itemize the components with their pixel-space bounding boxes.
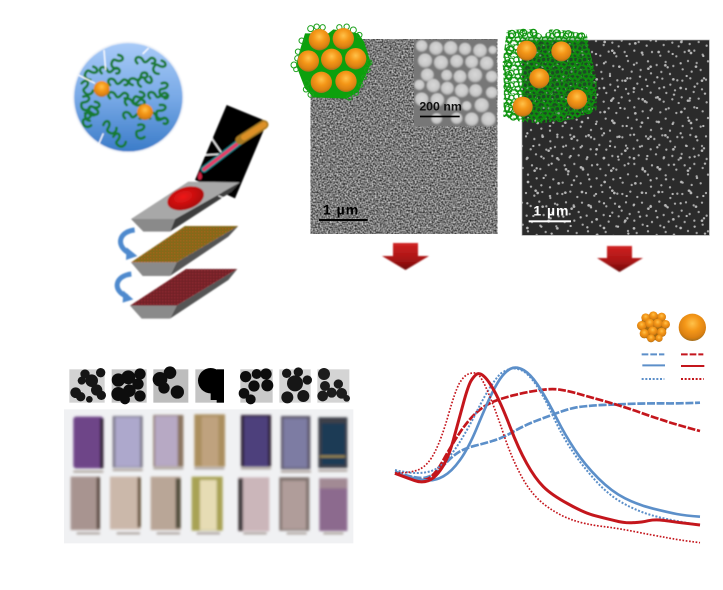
arrow: red down arrow left xyxy=(382,243,429,270)
SEM micrograph sparse xyxy=(522,40,709,235)
icon: black backing card with dropper xyxy=(195,105,267,198)
arrow: curved step arrow upper xyxy=(121,230,137,260)
inset scale label 200 nm: 200 nm xyxy=(419,99,462,113)
curve: red dashed xyxy=(395,389,700,480)
scale label 1 um xyxy=(319,201,368,221)
icon: dispersed particles with polymer xyxy=(503,29,597,123)
inset SEM micrograph xyxy=(414,39,498,127)
arrow: curved step arrow lower xyxy=(117,274,133,303)
icon: solution droplet with polymer chains and gold particles xyxy=(73,42,183,152)
panel: SEM image of dense particle film xyxy=(291,24,498,234)
icon: slide with red particle array xyxy=(130,269,237,319)
curve: blue solid xyxy=(395,368,700,517)
scale label 1 um xyxy=(529,203,571,222)
icon: slide with red deposited droplet xyxy=(131,182,240,232)
icon: clustered particle xyxy=(637,311,670,342)
photograph of coated cuvettes xyxy=(64,409,353,543)
panel: TEM thumbnails and cuvette photograph xyxy=(64,366,353,543)
panel: SEM image of sparse particle film xyxy=(503,29,709,235)
legend line samples xyxy=(642,354,704,379)
scale label 1 um: 1 µm xyxy=(533,203,569,219)
icon: slide with orange particle array xyxy=(131,226,238,276)
curve: blue dashed xyxy=(395,403,700,478)
curve: blue dotted xyxy=(395,368,700,525)
panel: spectra chart with legend xyxy=(395,311,706,543)
SEM micrograph dense xyxy=(311,39,497,234)
panel: nanoparticle solution and deposition schematic xyxy=(73,42,267,319)
icon: close-packed particles with polymer xyxy=(291,24,372,100)
arrow: red down arrow right xyxy=(597,246,643,272)
curve: red solid xyxy=(395,374,700,525)
scale label 1 um: 1 µm xyxy=(323,201,359,217)
curve: red dotted xyxy=(395,373,700,543)
icon: smooth spherical particle xyxy=(679,314,706,341)
TEM thumbnail row xyxy=(69,366,350,404)
